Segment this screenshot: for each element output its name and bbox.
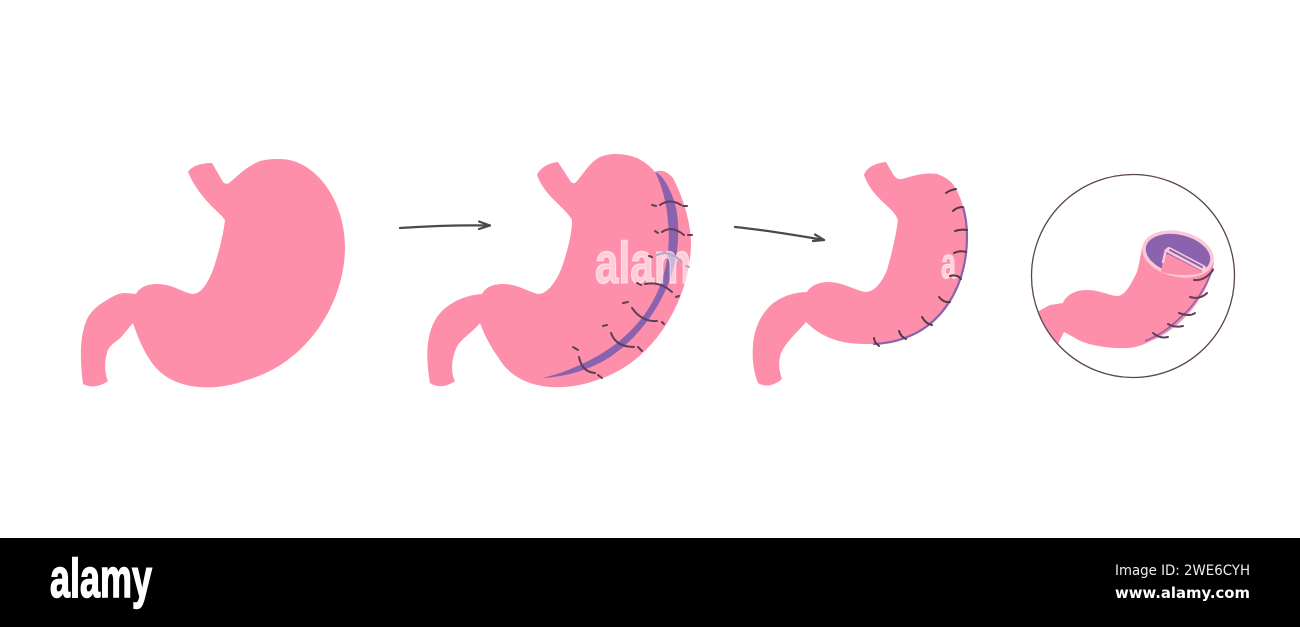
image id: Image ID: 2WE6CYH <box>1115 563 1250 579</box>
purple seam on stomach 3 <box>873 207 967 344</box>
watermark on stomach 3: a <box>941 239 956 288</box>
stomach 2: stapling line with stitches <box>427 154 715 387</box>
stomach 3: sleeve after resection <box>753 162 967 386</box>
purple seam on detail <box>1145 268 1213 341</box>
stomach 2 body <box>427 154 691 387</box>
footer bar <box>0 538 1300 627</box>
cropped stomach section <box>1030 245 1214 348</box>
arrow 2 <box>735 227 824 241</box>
footer logo: alamy <box>50 547 152 609</box>
folded flap edge with slit <box>1163 250 1203 268</box>
website: www.alamy.com <box>1115 584 1250 602</box>
open lumen rim <box>1140 226 1216 282</box>
stomach 3 body <box>753 162 967 386</box>
detail circle: cross-section of sleeve <box>1030 174 1234 378</box>
infographic canvas <box>0 154 1300 627</box>
arrow 1 <box>400 222 490 229</box>
purple staple band <box>542 172 678 378</box>
stitches on stomach 3 <box>874 189 967 346</box>
stitches on detail <box>1153 270 1213 338</box>
inner wall below flap <box>1161 254 1203 275</box>
stomach 1: intact stomach <box>81 159 345 387</box>
watermark on stomach 2: alamy <box>595 231 715 296</box>
stitches on stomach 2 <box>573 202 692 378</box>
circle outline <box>1032 174 1234 378</box>
